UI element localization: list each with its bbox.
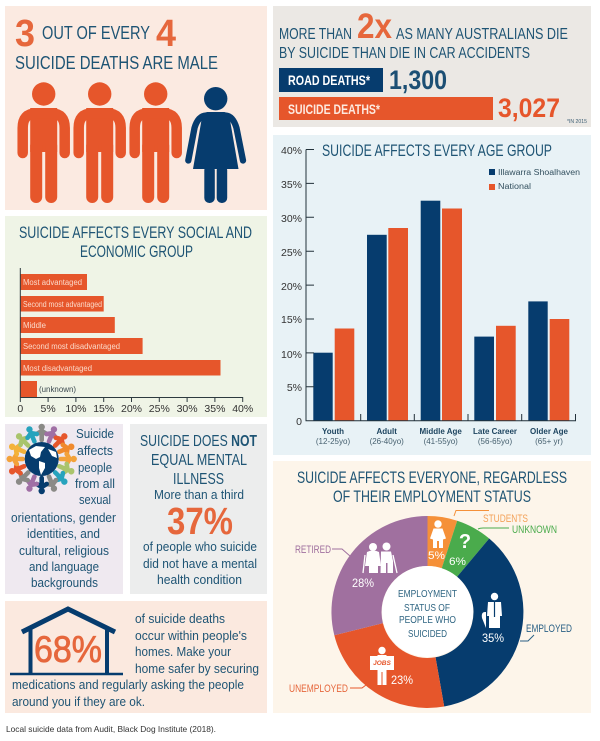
heading: 3 out of every 4: 3	[15, 13, 35, 55]
heading: more than 2x: MORE THAN	[279, 26, 352, 43]
bar chart: social groups: 10%	[65, 403, 86, 415]
heading: employment status: OF THEIR EMPLOYMENT STATUS	[333, 487, 531, 506]
bar chart: age groups: (26-40yo)	[370, 437, 404, 446]
donut centre label: EMPLOYMENT	[398, 588, 457, 600]
icon: male figure 1	[23, 82, 65, 203]
label: unknown 6%: ?	[459, 531, 471, 553]
heading: 3 out of every 4: OUT OF EVERY	[42, 23, 150, 43]
icon: male figure 3	[135, 82, 177, 203]
label: unknown 6%: 6%	[449, 556, 466, 568]
bar chart: age groups: 15%	[281, 314, 302, 326]
heading: social and economic: ECONOMIC GROUP	[80, 243, 193, 261]
bar chart: age groups: (12-25yo)	[316, 437, 350, 446]
bar chart: social groups: 15%	[93, 403, 114, 415]
donut chart: employment	[331, 516, 523, 708]
label: unknown 6%: UNKNOWN	[512, 524, 557, 536]
icon: house	[10, 609, 123, 674]
bar: road deaths: 1,300	[389, 65, 447, 95]
text: all people: sexual	[79, 493, 111, 507]
legend	[489, 168, 580, 191]
legend: National	[498, 182, 531, 191]
heading: 3 out of every 4: SUICIDE DEATHS ARE MALE	[15, 52, 218, 73]
heading: social and economic	[19, 224, 252, 261]
text: all people: cultural, religious	[19, 544, 109, 558]
text: home safety: around you if they are ok.	[12, 694, 145, 709]
bar chart: social groups: Second most disadvantaged	[23, 342, 120, 351]
bar chart: social groups: 40%	[232, 403, 253, 415]
heading: 3 out of every 4	[15, 13, 218, 73]
label: employed 35%: EMPLOYED	[526, 623, 572, 635]
icon: student	[430, 520, 446, 548]
panel: age group	[273, 135, 591, 455]
bar chart: age groups: (65+ yr)	[535, 437, 563, 446]
bar chart: social groups: Middle	[23, 321, 47, 330]
heading: employment status	[297, 468, 567, 506]
label: unemployed 23%: UNEMPLOYED	[289, 683, 348, 695]
legend: Illawarra Shoalhaven	[498, 168, 580, 177]
text: all people: identities, and	[27, 527, 100, 541]
panel: social and economic group	[5, 216, 267, 417]
bar: suicide deaths	[279, 93, 560, 123]
footnote: in 2015: *IN 2015	[567, 119, 587, 125]
bar chart: age groups	[281, 145, 576, 446]
panel: deaths at home	[5, 601, 267, 713]
text: home safety	[12, 611, 259, 709]
text: home safety: homes. Make your	[135, 644, 232, 659]
text: home safety: of suicide deaths	[135, 611, 225, 626]
bar chart: social groups: 30%	[177, 403, 198, 415]
bar chart: social groups: Most advantaged	[23, 278, 82, 287]
icon: elderly couple	[363, 542, 397, 573]
bar chart: age groups: (41-55yo)	[424, 437, 458, 446]
label: students 5%: 5%	[428, 550, 445, 562]
text: all people: people	[78, 461, 112, 475]
text: all people: from all	[75, 477, 115, 491]
text: all people: and language	[29, 560, 99, 574]
bar chart: age groups: Middle Age	[420, 427, 462, 436]
bar: suicide deaths: 3,027	[498, 93, 560, 123]
bar chart: social groups	[17, 268, 253, 415]
label: unemployed 23%: 23%	[391, 675, 413, 687]
bar chart: age groups: (56-65yo)	[478, 437, 512, 446]
heading: 3 out of every 4: 4	[156, 13, 176, 55]
text: all people: backgrounds	[31, 576, 98, 590]
panel: employment status	[273, 461, 591, 713]
bar chart: age groups: 10%	[281, 349, 302, 361]
label: retired 28%: RETIRED	[295, 544, 331, 556]
icon: female figure	[188, 87, 243, 203]
icon: unemployed person with jobs sign	[370, 647, 394, 685]
panel: all people	[5, 424, 123, 594]
bar chart: social groups: 5%	[41, 403, 56, 415]
panel: mental illness	[130, 424, 267, 594]
text: all people: orientations, gender	[11, 511, 116, 525]
text: no mental health condition: did not have a mental	[143, 556, 257, 571]
text: all people	[11, 427, 116, 590]
label: employed 35%	[482, 623, 572, 645]
text: all people: Suicide	[76, 427, 114, 441]
text: more than a third: More than a third	[154, 487, 244, 502]
heading: social and economic: SUICIDE AFFECTS EVERY SOCIAL AND	[19, 224, 252, 242]
bar chart: social groups: Second most advantaged	[23, 300, 102, 309]
panel: road vs suicide deaths	[273, 6, 591, 127]
label: unknown 6%	[449, 524, 557, 568]
heading: not equal mental illness	[140, 433, 257, 488]
bar chart: social groups: Most disadvantaged	[23, 364, 92, 373]
bar chart: social groups: (unknown)	[39, 385, 76, 394]
heading: not equal mental illness: SUICIDE DOES NOT	[140, 433, 257, 450]
bar: road deaths: ROAD DEATHS*	[288, 72, 370, 88]
statistic: 37%: 37%	[167, 501, 233, 543]
icon: globe with ring of people	[6, 424, 77, 494]
heading: more than 2x: BY SUICIDE THAN DIE IN CAR ACCIDENTS	[279, 45, 530, 62]
bar chart: age groups: 20%	[281, 281, 302, 293]
heading: more than 2x	[279, 7, 568, 62]
bar chart: age groups: Late Career	[473, 427, 517, 436]
text: no mental health condition: of people who suicide	[143, 539, 257, 554]
label: students 5%: STUDENTS	[483, 513, 528, 525]
bar chart: age groups: Adult	[376, 427, 397, 436]
donut centre label: STATUS OF	[404, 602, 450, 614]
bar chart: age groups: 40%	[281, 145, 302, 157]
bar: suicide deaths: SUICIDE DEATHS*	[288, 101, 380, 117]
bar chart: social groups: 25%	[149, 403, 170, 415]
source note: Local suicide data from Audit, Black Dog Institute (2018).	[6, 724, 216, 734]
label: retired 28%	[295, 544, 374, 590]
statistic: 68%: 68%	[34, 629, 102, 670]
heading: more than 2x: 2x	[357, 7, 392, 46]
bar chart: age groups: 35%	[281, 179, 302, 191]
bar chart: age groups: 25%	[281, 247, 302, 259]
bar chart: social groups: 20%	[121, 403, 142, 415]
bar chart: age groups: 5%	[287, 382, 302, 394]
text: home safety: home safer by securing	[135, 661, 259, 676]
bar: road deaths	[279, 65, 447, 95]
panel: male deaths	[5, 6, 267, 210]
bar chart: age groups: 30%	[281, 213, 302, 225]
text: no mental health condition: health condition	[157, 572, 242, 587]
text: home safety: occur within people's	[135, 628, 247, 643]
donut centre label: PEOPLE WHO	[399, 614, 456, 626]
bar chart: age groups: Youth	[322, 427, 344, 436]
text: no mental health condition	[143, 539, 257, 587]
icon: unemployed person with jobs sign: JOBS	[373, 660, 392, 667]
text: all people: affects	[77, 444, 113, 458]
bar chart: age groups: 0	[296, 416, 302, 428]
heading: not equal mental illness: EQUAL MENTAL	[151, 452, 247, 469]
bar chart: age groups: Older Age	[530, 427, 569, 436]
label: students 5%	[428, 510, 528, 562]
label: unemployed 23%	[289, 675, 413, 695]
heading: not equal mental illness: ILLNESS	[173, 471, 224, 488]
icon: employed person	[482, 593, 502, 628]
text: home safety: medications and regularly asking the people	[12, 677, 244, 692]
bar chart: social groups: 0	[17, 403, 23, 415]
bar chart: social groups: 35%	[204, 403, 225, 415]
label: employed 35%: 35%	[482, 633, 504, 645]
label: retired 28%: 28%	[352, 578, 374, 590]
donut centre label	[398, 588, 457, 640]
donut centre label: SUICIDED	[408, 628, 447, 640]
icon: male figure 2	[79, 82, 121, 203]
